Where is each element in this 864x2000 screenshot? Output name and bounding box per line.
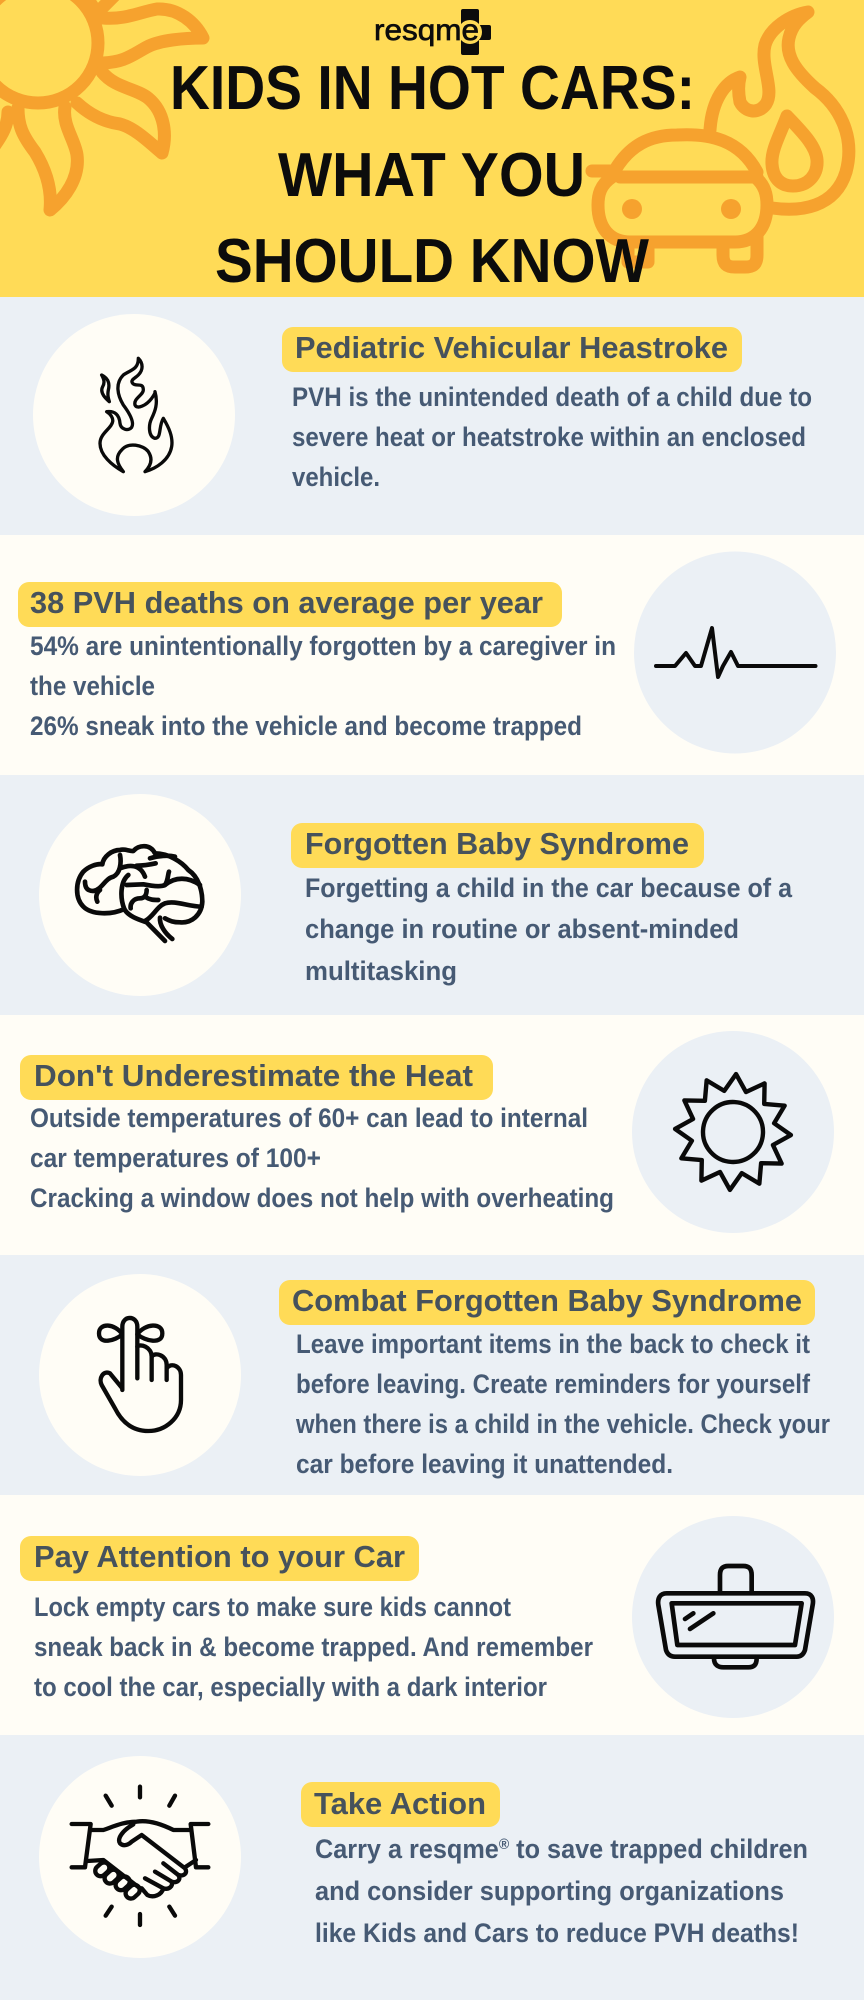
text block: Carry a resqme: [315, 1834, 512, 1864]
title: WHAT YOU: [278, 141, 585, 210]
panel: forgotten baby syndrome: [0, 775, 864, 1015]
title: [170, 54, 695, 296]
heading: Don't Underestimate the Heat: [34, 1058, 473, 1093]
text block: Outside temperatures of 60+ can lead to internal: [30, 1103, 588, 1133]
text block: 54% are unintentionally forgotten by a caregiver in: [30, 631, 616, 661]
text block: [34, 1592, 593, 1702]
icon circle: flame: [33, 314, 235, 516]
text block: 26% sneak into the vehicle and become trapped: [30, 711, 582, 741]
icon circle: sun: [632, 1031, 834, 1233]
panel: header: [0, 0, 864, 297]
text block: change in routine or absent-minded: [305, 914, 739, 944]
heading: Pay Attention to your Car: [34, 1539, 405, 1574]
text block: Forgetting a child in the car because of a: [305, 873, 793, 903]
logo: resqme: [374, 9, 491, 55]
text block: [292, 382, 812, 492]
text block: multitasking: [305, 956, 457, 986]
icon circle: rearview mirror: [632, 1516, 834, 1718]
panel: PVH deaths: [0, 535, 864, 775]
panel: pay attention to your car: [0, 1495, 864, 1735]
text block: PVH is the unintended death of a child due to: [292, 382, 812, 412]
logo: resqme: resqme: [374, 14, 479, 47]
panel: pediatric vehicular heatstroke: [0, 297, 864, 535]
text block: like Kids and Cars to reduce PVH deaths!: [315, 1918, 799, 1948]
heading: Pediatric Vehicular Heastroke: [295, 330, 728, 365]
icon circle: brain: [39, 794, 241, 996]
text block: [30, 631, 616, 741]
text block: Cracking a window does not help with overheating: [30, 1183, 614, 1213]
panel: underestimate the heat: [0, 1015, 864, 1255]
icon: orange sun: [0, 0, 203, 210]
text block: to cool the car, especially with a dark interior: [34, 1672, 547, 1702]
text block: car before leaving it unattended.: [296, 1449, 673, 1479]
text block: vehicle.: [292, 462, 380, 492]
text block: Leave important items in the back to check it: [296, 1329, 810, 1359]
text block: sneak back in & become trapped. And remember: [34, 1632, 593, 1662]
text block: and consider supporting organizations: [315, 1876, 784, 1906]
icon circle: heartbeat: [634, 552, 836, 754]
text block: [295, 1329, 830, 1479]
text block: car temperatures of 100+: [30, 1143, 321, 1173]
heading: Take Action: [314, 1786, 486, 1821]
text block: ®: [499, 1836, 509, 1853]
heading: [301, 1782, 500, 1827]
heading: Forgotten Baby Syndrome: [305, 826, 689, 861]
title: SHOULD KNOW: [215, 227, 649, 296]
heading: Combat Forgotten Baby Syndrome: [292, 1283, 802, 1318]
text block: [305, 873, 793, 986]
title: KIDS IN HOT CARS:: [170, 54, 695, 123]
text block: before leaving. Create reminders for yourself: [296, 1369, 811, 1399]
icon: orange car on fire: [592, 12, 849, 267]
text block: to save trapped children: [509, 1834, 808, 1864]
text block: severe heat or heatstroke within an enclosed: [292, 422, 806, 452]
text block: the vehicle: [30, 671, 155, 701]
icon circle: finger with ribbon: [39, 1274, 241, 1476]
text block: [315, 1834, 808, 1948]
heading: 38 PVH deaths on average per year: [30, 585, 543, 620]
icon circle: handshake: [39, 1756, 241, 1958]
text block: [30, 1103, 614, 1213]
panel: take action: [0, 1735, 864, 2000]
text block: Lock empty cars to make sure kids cannot: [34, 1592, 511, 1622]
panel: combat forgotten baby syndrome: [0, 1255, 864, 1495]
